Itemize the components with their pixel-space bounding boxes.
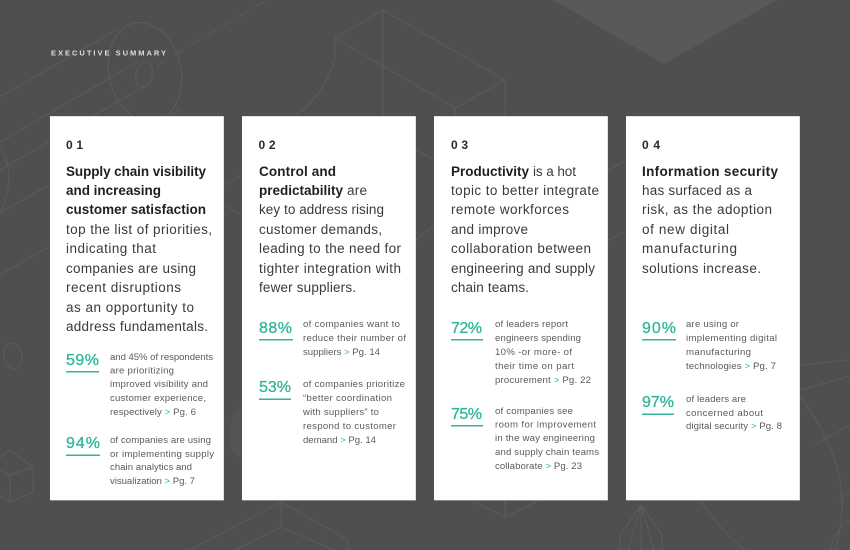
text block: supply chain visibility	[66, 164, 212, 334]
panel: card 02	[242, 116, 416, 500]
text block: information security: of new digital	[642, 222, 729, 237]
stat: 94%: chain analytics and	[110, 462, 192, 473]
text block: productivity: collaboration between	[451, 241, 591, 256]
stat: 75%: 75%	[451, 406, 482, 423]
stat: 53%: 53%	[259, 379, 291, 396]
stat: 88%: 88%	[259, 320, 292, 337]
number 01: 0 1	[66, 138, 83, 152]
stat: 88%	[259, 319, 406, 358]
stat: 90%: implementing digital	[686, 333, 777, 344]
stat: 94%: visualization > Pg. 7	[110, 476, 195, 487]
text block: control and predictability: leading to the need for	[259, 241, 402, 256]
stat: 90%: are using or	[686, 319, 740, 330]
stat: 59%: respectively > Pg. 6	[110, 407, 196, 418]
text block: information security	[642, 164, 778, 276]
stat: 53%: with suppliers” to	[302, 407, 379, 418]
stat: 72%: 72%	[451, 320, 482, 337]
stat: 59%: 59%	[66, 352, 99, 369]
text block: productivity: chain teams.	[451, 280, 529, 295]
stat: 94%: of companies are using	[110, 435, 211, 446]
stat: 72%: of leaders report	[495, 319, 568, 330]
text block: supply chain visibility: companies are using	[66, 261, 196, 276]
stat: 97%: 97%	[642, 394, 674, 411]
stat: 88%: of companies want to	[303, 319, 400, 330]
text block: information security: manufacturing	[642, 241, 737, 256]
text block: supply chain visibility: recent disruptions	[66, 280, 181, 295]
text block: productivity: is a hot	[533, 164, 576, 179]
stat: 53%: “better coordination	[303, 393, 392, 404]
stat: 72%: procurement > Pg. 22	[495, 375, 591, 386]
text block: supply chain visibility: indicating that	[66, 241, 156, 256]
text block: control and predictability: customer demands,	[259, 222, 382, 237]
text block: control and predictability	[259, 164, 402, 295]
stat: 72%: 10% -or more- of	[495, 347, 572, 358]
panel: card 01	[50, 116, 224, 500]
text block: control and predictability: fewer suppliers.	[259, 280, 356, 295]
stat: 75%: and supply chain teams	[495, 447, 599, 458]
stat: 75%: room for improvement	[495, 420, 596, 430]
stat: 53%: demand > Pg. 14	[303, 435, 377, 446]
stat: 72%: engineers spending	[495, 333, 581, 344]
stat: 94%: or implementing supply	[110, 449, 214, 460]
text block: information security: Information security	[642, 164, 778, 179]
text block: productivity: topic to better integrate	[451, 183, 599, 198]
text block: information security: has surfaced as a	[642, 183, 752, 198]
stat: 53%	[259, 379, 405, 446]
stat: 90%: technologies > Pg. 7	[686, 361, 776, 372]
stat: 97%: digital security > Pg. 8	[686, 421, 782, 432]
stat: 94%	[66, 435, 214, 487]
stat: 90%: manufacturing	[686, 347, 751, 358]
stat: 59%: improved visibility and	[110, 379, 208, 390]
stat: 72%	[451, 319, 591, 386]
stat: 75%: of companies see	[495, 406, 573, 417]
text block: productivity: remote workforces	[451, 202, 569, 217]
panel: card 03	[434, 116, 608, 500]
stat: 94%: 94%	[66, 435, 100, 452]
text block: control and predictability: key to address rising	[259, 202, 384, 217]
stat: 97%	[642, 394, 782, 432]
number 04: 0 4	[642, 138, 660, 152]
text block: productivity: engineering and supply	[451, 261, 595, 276]
stat: 90%	[642, 319, 777, 372]
text block: control and predictability: predictability	[259, 183, 343, 198]
stat: 97%: of leaders are	[686, 394, 746, 405]
text block: information security: risk, as the adoption	[642, 202, 772, 217]
text block: supply chain visibility: and increasing	[66, 183, 161, 198]
stat: 75%: collaborate > Pg. 23	[495, 461, 582, 472]
stat: 53%: of companies prioritize	[303, 379, 405, 390]
stat: 88%: reduce their number of	[303, 333, 406, 344]
stat: 75%: in the way engineering	[495, 433, 595, 444]
stat: 97%: concerned about	[686, 408, 763, 419]
text block: supply chain visibility: customer satisfaction	[66, 202, 206, 217]
stat: 75%	[451, 406, 599, 472]
text block: control and predictability: Control and	[259, 164, 336, 179]
text block: supply chain visibility: as an opportunity to	[66, 300, 194, 315]
stat: 59%	[66, 352, 213, 418]
text block: productivity: and improve	[451, 222, 528, 237]
stat: 72%: their time on part	[495, 361, 574, 372]
stat: 90%: 90%	[642, 320, 676, 337]
text block: productivity: Productivity	[451, 164, 529, 179]
stat: 59%: are prioritizing	[110, 366, 174, 376]
text block: supply chain visibility: top the list of priorities,	[66, 222, 212, 237]
stat: 88%: suppliers > Pg. 14	[303, 347, 381, 358]
page label: executive summary: EXECUTIVE SUMMARY	[51, 48, 166, 58]
text block: supply chain visibility: address fundamentals.	[66, 319, 208, 334]
number 03: 0 3	[451, 138, 468, 152]
stat: 59%: and 45% of respondents	[110, 352, 213, 363]
number 02: 0 2	[258, 138, 276, 152]
stat: 53%: respond to customer	[303, 421, 397, 432]
text block: control and predictability: are	[347, 183, 367, 198]
text block: control and predictability: tighter integration with	[259, 261, 401, 276]
panel: card 04	[626, 116, 800, 500]
text block: productivity	[451, 164, 599, 295]
text block: supply chain visibility: Supply chain visibility	[66, 164, 206, 179]
stat: 59%: customer experience,	[110, 393, 206, 404]
text block: information security: solutions increase.	[642, 261, 761, 276]
